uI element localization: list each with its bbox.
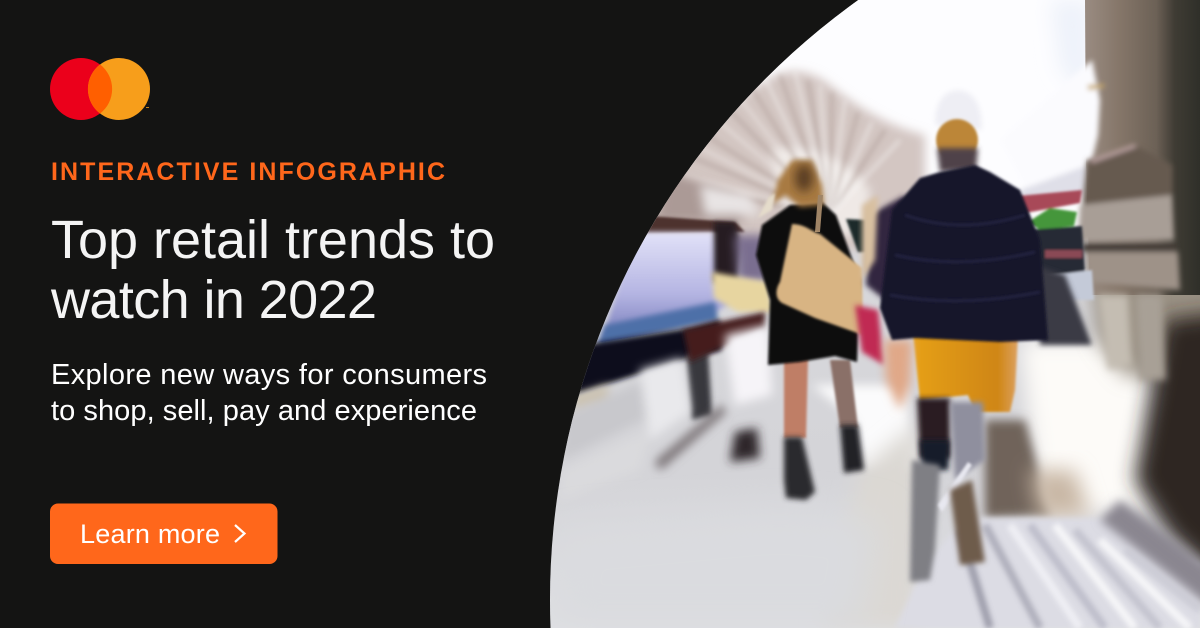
yellow shopping bag: [712, 272, 772, 312]
pink flowers: [855, 305, 884, 365]
grey streak: [564, 386, 644, 459]
bag strap: [815, 195, 823, 232]
eyebrow heading: INTERACTIVE INFOGRAPHIC: [51, 158, 445, 186]
dark course: [1082, 243, 1176, 252]
shopper: man in dark jacket and orange skirt: [880, 90, 1092, 582]
stall roof: [655, 172, 745, 222]
dark lower band: [572, 320, 722, 395]
neck shadow: [937, 148, 978, 172]
carried bag: [950, 480, 985, 565]
lower course: [1085, 252, 1180, 290]
streaked pavement at right: [895, 500, 1200, 628]
pavement base: [895, 518, 1200, 628]
person behind, purple coat: [866, 195, 905, 300]
left leg: [784, 358, 808, 438]
second pillar: [1136, 295, 1166, 380]
grey carrier bag to the right: [1035, 265, 1092, 345]
pink-orange hand blur: [884, 340, 912, 410]
dark car window: [846, 219, 866, 252]
quilting highlights: [890, 215, 1040, 301]
pale streak on the shoe: [938, 462, 972, 512]
subtitle: to shop, sell, pay and experience: [51, 395, 477, 427]
pedestrian dark legs: [686, 350, 712, 420]
title: Top retail trends to: [51, 210, 495, 270]
white blur above the head: [935, 90, 982, 130]
right boot: [840, 425, 864, 473]
maroon bag: [683, 312, 765, 362]
orange skirt: [913, 334, 1018, 412]
dark diagonal shadow: [655, 405, 726, 470]
shopper: woman with tan bag: [756, 160, 905, 500]
dark diagonal wedge: [1100, 500, 1200, 615]
lower white streak: [557, 466, 562, 497]
building lower shadow: [1135, 310, 1200, 600]
black coat: [756, 202, 860, 365]
red awning and green sign behind the man: [1018, 190, 1094, 300]
subtitle: [51, 359, 487, 427]
radial motion streaks over the arch: [691, 74, 900, 210]
purple blur behind: [735, 235, 770, 282]
hair: [772, 160, 824, 207]
dark pedestrian top: [714, 222, 742, 282]
logo: overlapping red and amber circles: [50, 58, 150, 120]
pavement and base: [540, 0, 1200, 628]
pale pillar: [1098, 295, 1132, 370]
building ledges: [1078, 144, 1180, 380]
lower dark leg: [920, 440, 950, 470]
white streak: [640, 358, 690, 440]
lower building pillars, fading into the glare: [1080, 295, 1200, 390]
button: learn more: Learn more: [80, 519, 220, 549]
white highlights near building edge: [1021, 58, 1106, 196]
tan halo at the edge of the brown blur: [1030, 470, 1090, 518]
pale hair wisp: [758, 193, 775, 218]
button: learn more: [50, 504, 278, 564]
title: watch in 2022: [50, 270, 377, 330]
stone panel: [1078, 195, 1174, 242]
photo: blurred shoppers on a city street, clipped to a large circle: [540, 0, 1200, 628]
denim blue band: [598, 302, 718, 345]
sky: [690, 0, 1100, 240]
bright floor patch: [812, 385, 915, 470]
left boot: [784, 437, 815, 500]
title: [50, 210, 495, 330]
upper dark leg: [917, 398, 950, 458]
beige kerb: [571, 385, 610, 408]
tan shoulder bag: [776, 224, 863, 335]
subtitle: Explore new ways for consumers: [51, 359, 487, 391]
market stall on the left: [572, 172, 772, 420]
dark crown of hair: [795, 164, 813, 192]
soft floor left of the man: [820, 420, 920, 628]
pale grey floor: [550, 510, 880, 628]
brown blur by the man's legs: [985, 420, 1050, 518]
small far boot: [730, 428, 760, 462]
building on the right: [1085, 0, 1200, 295]
blue stall window: [600, 232, 735, 345]
arch of blurred building behind the shoppers: [640, 71, 925, 250]
head: [936, 119, 978, 161]
pale blue sky near the building: [1054, 2, 1085, 76]
blonde blur: [862, 195, 878, 280]
pink ledge highlight: [1090, 144, 1136, 163]
lilac leg: [950, 402, 985, 480]
right leg: [830, 360, 858, 428]
stall roof highlight: [700, 185, 760, 215]
stall awning: [640, 216, 745, 234]
radial streaks: [960, 525, 1200, 628]
grey lower leg: [910, 460, 940, 582]
white blur by the woman: [725, 325, 772, 405]
pale streaked pavement on the left: [560, 325, 915, 500]
white glare and shop front: [1020, 340, 1150, 515]
dark upper ledge: [1082, 145, 1172, 210]
navy puffer jacket: [880, 165, 1048, 342]
